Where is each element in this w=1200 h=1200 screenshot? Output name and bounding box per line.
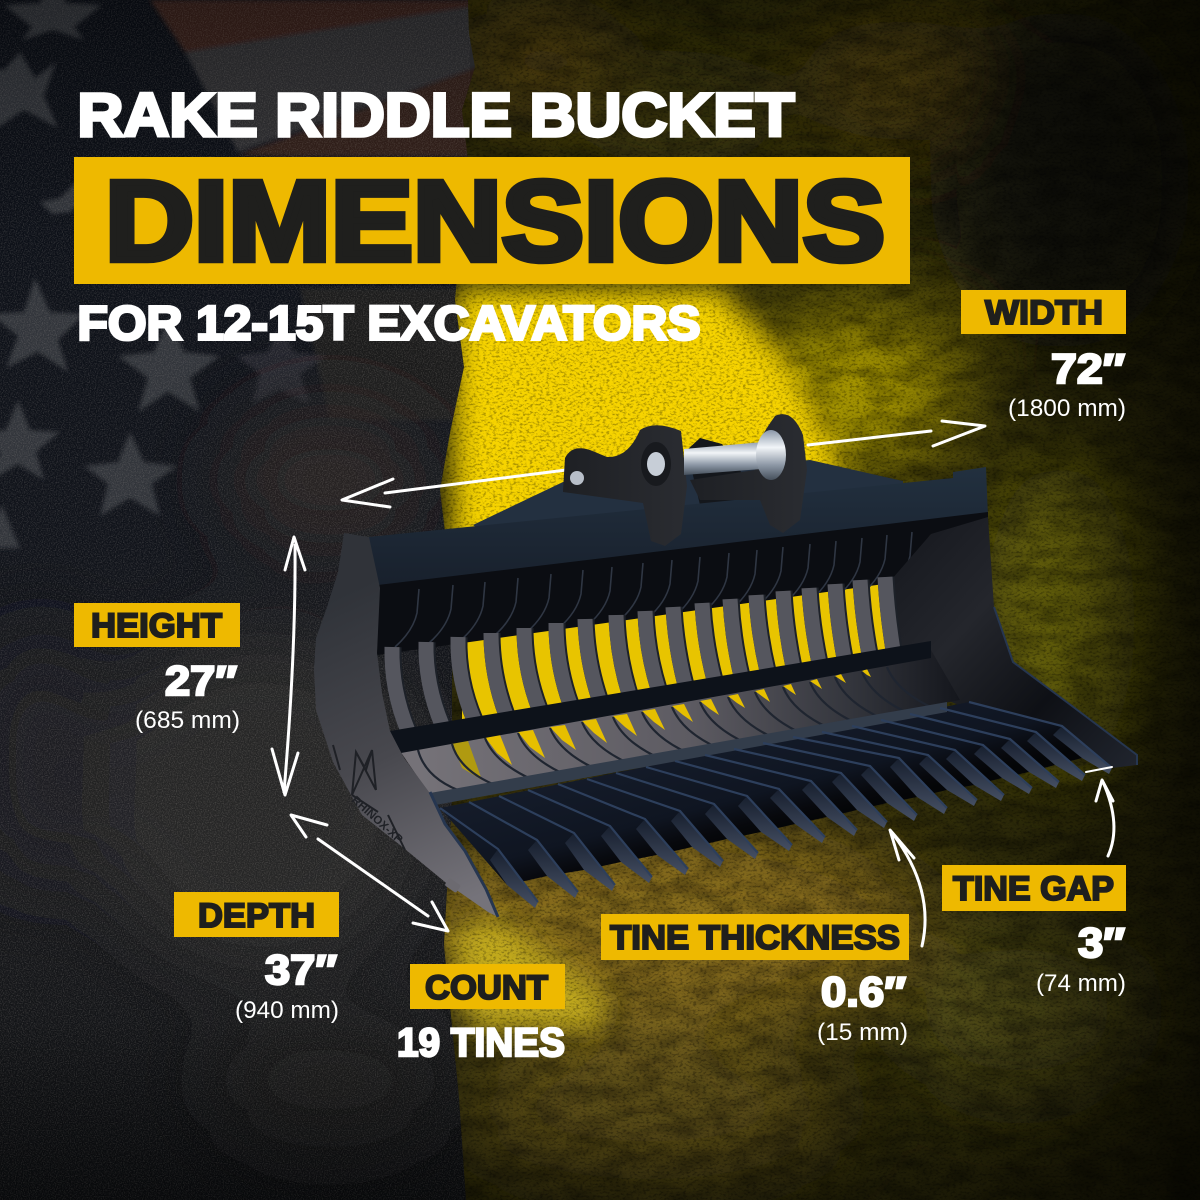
bucket: logo on side plate <box>333 745 405 850</box>
label: depth: DEPTH <box>198 897 315 935</box>
bucket: left ear <box>563 425 687 546</box>
bucket: upper rib hooks <box>395 532 912 647</box>
background: flag stripes <box>150 0 480 420</box>
value: thickness inches: 0.6″ <box>821 968 906 1015</box>
arrow: width left <box>342 470 566 507</box>
bucket: top beam <box>368 467 988 588</box>
label: count <box>397 964 565 1065</box>
value: tine count: 19 TINES <box>397 1021 565 1065</box>
bucket: right side wall <box>892 517 1137 768</box>
background: yellow paint area <box>440 0 1200 1200</box>
value: gap inches: 3″ <box>1078 919 1125 966</box>
value: depth mm: (940 mm) <box>235 997 339 1024</box>
tine top edges <box>440 702 1112 902</box>
bucket: tines <box>440 702 1112 908</box>
background: left fabric grain <box>0 0 470 1200</box>
arrow: tine thickness <box>890 830 925 946</box>
arrow: depth <box>291 815 448 931</box>
bucket: yellow showing through slots <box>462 570 905 728</box>
bucket: lower rib surface <box>396 650 960 801</box>
value: depth inches: 37″ <box>265 946 337 993</box>
label: depth <box>174 892 339 1024</box>
background: left dark fabric folds <box>0 400 450 1150</box>
bucket: left side plate <box>314 533 498 917</box>
bucket: pin flange right <box>756 430 786 480</box>
value: width inches: 72″ <box>1051 345 1125 392</box>
arrow: tine gap indicator <box>1086 767 1112 772</box>
value: height inches: 27″ <box>165 657 237 704</box>
bucket: yellow slivers <box>452 669 871 780</box>
background: light streak under bucket <box>450 917 610 1030</box>
bucket: right plate edge <box>994 607 1137 765</box>
bucket: left plate inner edge <box>430 792 498 917</box>
label: tine thickness: TINE THICKNESS <box>610 919 900 957</box>
bucket illustration <box>314 414 1137 917</box>
value: height mm: (685 mm) <box>135 707 240 734</box>
bucket: right ear <box>690 414 807 533</box>
bucket: pin end left <box>647 452 665 476</box>
label: tine thickness <box>601 914 909 1046</box>
label: width <box>961 290 1126 422</box>
arrow: tine gap <box>1096 780 1114 856</box>
label: width: WIDTH <box>985 294 1103 332</box>
value: gap mm: (74 mm) <box>1036 970 1126 997</box>
value: thickness mm: (15 mm) <box>817 1019 908 1046</box>
bucket: pin shaft <box>684 441 775 475</box>
bucket: left ear boss <box>641 442 671 486</box>
bucket: mount plate <box>473 460 903 530</box>
title: rake riddle bucket: RAKE RIDDLE BUCKET <box>78 81 794 149</box>
bucket: dark shadow band <box>377 512 988 655</box>
bucket: plate bolt <box>444 878 461 893</box>
label: height: HEIGHT <box>91 607 222 645</box>
bucket: upper ribs <box>393 577 894 731</box>
background: flag stars <box>0 0 326 548</box>
arrow: width right <box>808 421 985 446</box>
bucket: tine field <box>440 702 1112 885</box>
logo wordmark: RHINOX-XP <box>349 794 405 846</box>
bucket: cross bar <box>390 641 931 753</box>
arrow: height <box>272 537 305 795</box>
label: height <box>74 603 240 734</box>
tine blades <box>490 726 1112 908</box>
subtitle: for excavators: FOR 12-15T EXCAVATORS <box>78 296 700 350</box>
label: tine gap <box>942 865 1126 997</box>
bucket: lower rib dark curves <box>418 667 935 793</box>
bucket: rear ear <box>687 438 755 505</box>
value: width mm: (1800 mm) <box>1008 395 1126 422</box>
label: count: COUNT <box>425 969 548 1007</box>
background: bright yellow brush stroke <box>440 284 859 530</box>
bucket: front bar <box>430 702 947 806</box>
heading: dimensions banner: DIMENSIONS <box>105 158 885 284</box>
bucket: upper rib faces <box>392 577 893 731</box>
bucket: small rear pin end <box>570 471 584 485</box>
label: tine gap: TINE GAP <box>953 870 1114 908</box>
